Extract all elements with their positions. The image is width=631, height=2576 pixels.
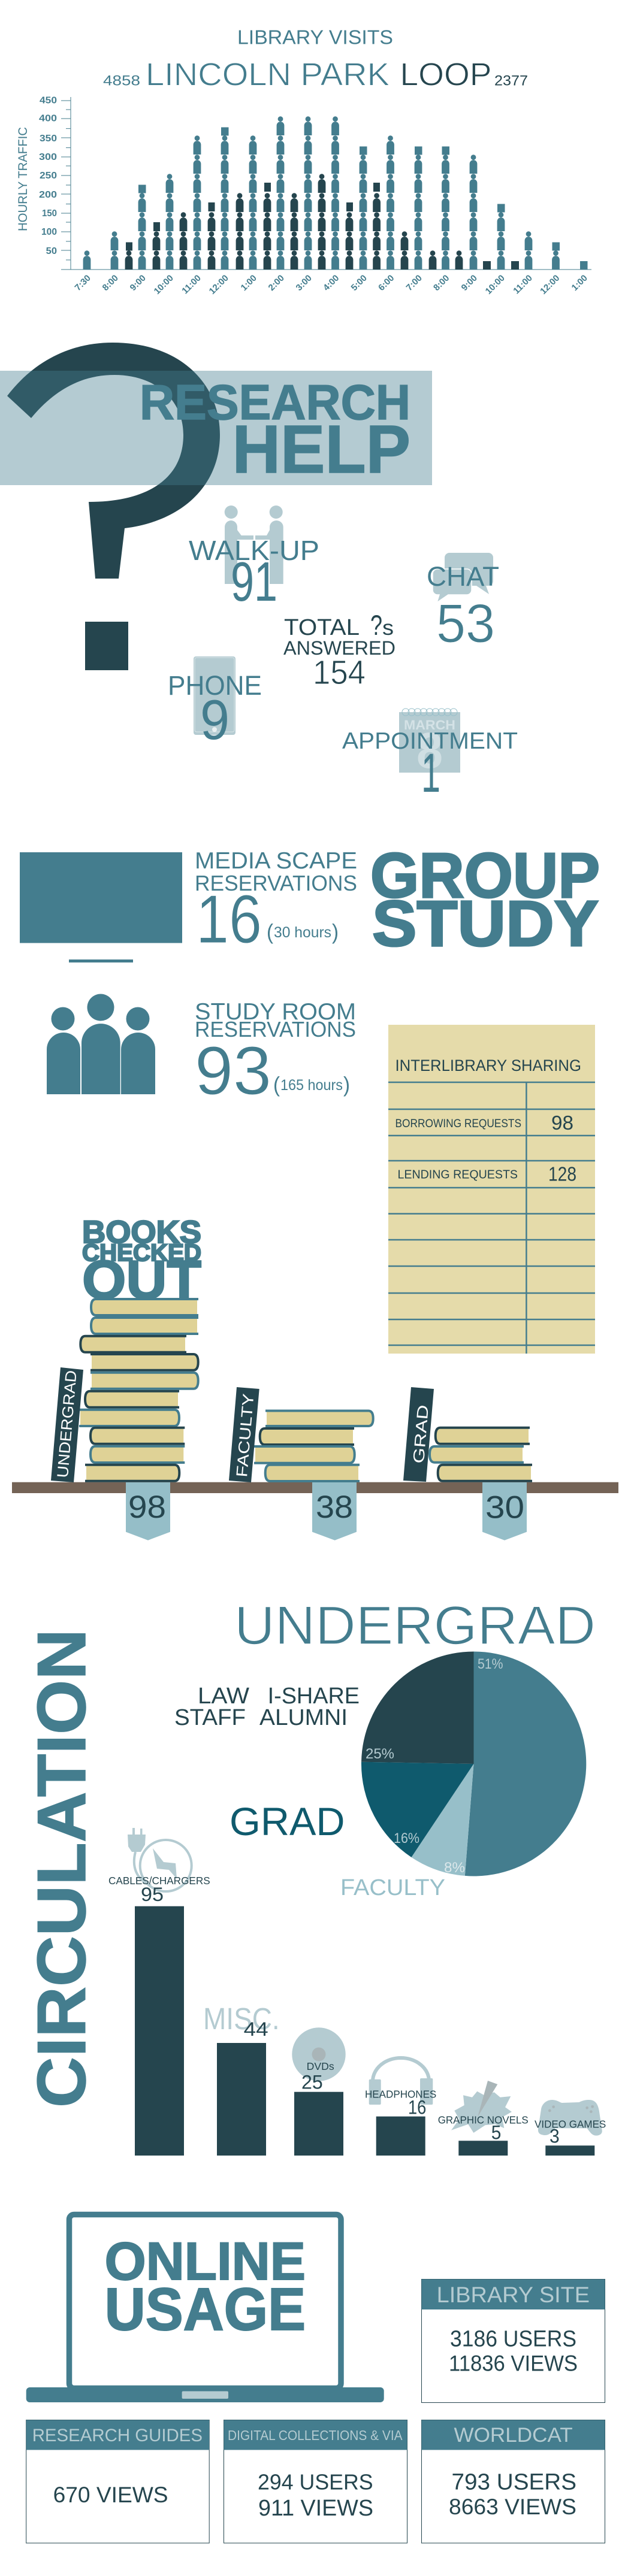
axis label: hourly traffic: HOURLY TRAFFIC bbox=[16, 127, 30, 231]
text: study room reservations: RESERVATIONS bbox=[195, 1017, 356, 1042]
panel: interlibrary sharing card: 128 bbox=[548, 1163, 576, 1185]
label: law, i-share, staff, alumni: I-SHARE bbox=[268, 1684, 360, 1709]
pie chart: 25% bbox=[366, 1746, 394, 1762]
icon: calendar: 8 bbox=[416, 722, 443, 779]
text: media scape reservations: ) bbox=[332, 919, 339, 944]
grad stack bbox=[430, 1428, 532, 1481]
panel: digital collections and via bbox=[224, 2420, 407, 2543]
stat: chat bbox=[427, 553, 499, 654]
y axis labels: 300 bbox=[39, 152, 57, 162]
banner band bbox=[0, 371, 432, 485]
x axis labels: 8:00 bbox=[101, 273, 120, 293]
stat: total questions answered: TOTAL bbox=[284, 615, 360, 640]
bookmark: undergrad 98 bbox=[126, 1482, 170, 1540]
bookmark: faculty 38: 38 bbox=[316, 1490, 353, 1525]
pie chart: 16% bbox=[394, 1830, 419, 1847]
text: study room reservations: 93 bbox=[195, 1033, 271, 1109]
panel: library site: 11836 VIEWS bbox=[449, 2351, 578, 2375]
icon: laptop bbox=[26, 2215, 384, 2402]
text: media scape reservations: RESERVATIONS bbox=[195, 871, 357, 895]
stat: walk-up: 91 bbox=[231, 550, 277, 613]
panel: digital collections and via: 911 VIEWS bbox=[258, 2496, 373, 2521]
icon: game controller bbox=[538, 2100, 602, 2136]
heading: group study: GROUP bbox=[370, 840, 600, 911]
spine: faculty: FACULTY bbox=[233, 1393, 257, 1478]
bookmark: undergrad 98: 98 bbox=[128, 1490, 166, 1525]
icon: comic burst bbox=[451, 2081, 512, 2133]
pie chart: 51% bbox=[478, 1656, 503, 1672]
text: study room reservations: 165 hours bbox=[280, 1077, 343, 1094]
stat: walk-up: WALK-UP bbox=[189, 535, 319, 566]
panel: worldcat bbox=[422, 2420, 605, 2543]
bar: DVDs: 25 bbox=[301, 2072, 323, 2093]
stat: chat: 53 bbox=[436, 594, 495, 654]
stat: phone bbox=[168, 656, 262, 751]
stat: total questions answered bbox=[283, 609, 395, 692]
text: study room reservations: ) bbox=[343, 1072, 350, 1097]
bar: video games: VIDEO GAMES bbox=[535, 2118, 606, 2130]
spine: faculty bbox=[229, 1387, 259, 1482]
section: group study bbox=[20, 840, 600, 1354]
heading: online usage: ONLINE bbox=[105, 2231, 306, 2291]
text: media scape reservations: 16 bbox=[196, 882, 262, 958]
panel: interlibrary sharing card: LENDING REQUESTS bbox=[398, 1168, 518, 1181]
x axis labels: 3:00 bbox=[294, 273, 314, 293]
stat: phone: PHONE bbox=[168, 670, 262, 701]
y axis labels: 400 bbox=[39, 114, 57, 124]
icon: phone bbox=[194, 656, 236, 735]
heading: research help: HELP bbox=[233, 411, 410, 487]
text: media scape reservations: ( bbox=[267, 919, 273, 944]
icon: calendar: MARCH bbox=[404, 718, 455, 732]
stat: walk-up bbox=[189, 505, 319, 613]
x axis labels: 4:00 bbox=[321, 273, 341, 293]
section: online usage bbox=[26, 2215, 605, 2543]
stat: appointment: 1 bbox=[421, 743, 440, 804]
heading: circulation: CIRCULATION bbox=[24, 1629, 100, 2108]
panel: digital collections and via: 294 USERS bbox=[258, 2469, 373, 2494]
panel: library site: 3186 USERS bbox=[450, 2327, 576, 2352]
panel: interlibrary sharing card: 98 bbox=[551, 1112, 573, 1134]
bar: cables and chargers bbox=[108, 1828, 210, 2156]
label: law, i-share, staff, alumni: LAW bbox=[198, 1684, 249, 1709]
bar: video games bbox=[535, 2100, 606, 2156]
x axis labels: 2:00 bbox=[267, 273, 286, 293]
heading: books checked out bbox=[82, 1215, 201, 1310]
panel: research guides: RESEARCH GUIDES bbox=[32, 2426, 203, 2445]
text: study room reservations: STUDY ROOM bbox=[195, 999, 356, 1025]
bar: DVDs: DVDs bbox=[307, 2060, 334, 2072]
label: law, i-share, staff, alumni: ALUMNI bbox=[259, 1705, 348, 1730]
Lincoln Park columns bbox=[83, 116, 587, 270]
y axis labels: 150 bbox=[42, 208, 57, 219]
title: library visits: LIBRARY VISITS bbox=[237, 26, 393, 49]
stat: appointment bbox=[342, 709, 518, 804]
x axis labels: 6:00 bbox=[376, 273, 396, 293]
x axis labels: 8:00 bbox=[431, 273, 451, 293]
heading: Lincoln Park vs Loop bbox=[103, 57, 528, 93]
pie chart: 8% bbox=[444, 1860, 465, 1876]
x axis labels: 9:00 bbox=[460, 273, 479, 293]
section: circulation bbox=[24, 1596, 606, 2156]
label: law, i-share, staff, alumni: STAFF bbox=[174, 1705, 246, 1730]
panel: worldcat: WORLDCAT bbox=[454, 2424, 573, 2447]
panel: research guides bbox=[26, 2420, 209, 2543]
icon: monitor bbox=[20, 852, 182, 962]
panel: worldcat: 793 USERS bbox=[452, 2469, 576, 2495]
bar: graphic novels: 5 bbox=[491, 2122, 501, 2144]
heading: books checked out: BOOKS bbox=[82, 1215, 201, 1250]
text: study room reservations: ( bbox=[273, 1072, 280, 1097]
spine: grad: GRAD bbox=[409, 1404, 432, 1464]
heading: Lincoln Park vs Loop: LINCOLN PARK bbox=[146, 57, 390, 93]
icon: handshake bbox=[225, 505, 283, 584]
panel: interlibrary sharing card: INTERLIBRARY SHARING bbox=[395, 1057, 581, 1074]
icon: headphones bbox=[369, 2058, 433, 2105]
bookmark: grad 30: 30 bbox=[485, 1490, 524, 1525]
heading: Lincoln Park vs Loop: 4858 bbox=[103, 73, 140, 89]
heading: research help bbox=[140, 374, 410, 487]
heading: group study bbox=[370, 840, 600, 959]
stat: total questions answered: ? bbox=[370, 609, 382, 641]
panel: library site bbox=[422, 2280, 605, 2403]
icon: three people bbox=[47, 994, 155, 1094]
label: faculty: FACULTY bbox=[340, 1875, 445, 1900]
x axis labels: 1:00 bbox=[570, 273, 590, 293]
panel: research guides: 670 VIEWS bbox=[53, 2483, 168, 2507]
label: undergrad: UNDERGRAD bbox=[234, 1596, 596, 1656]
panel: library site: LIBRARY SITE bbox=[437, 2283, 590, 2307]
spine: undergrad: UNDERGRAD bbox=[53, 1370, 80, 1478]
bar: graphic novels bbox=[438, 2081, 529, 2156]
bar: DVDs bbox=[292, 2027, 346, 2156]
stat: phone: 9 bbox=[200, 688, 230, 751]
y axis labels: 50 bbox=[46, 246, 57, 256]
x axis labels: 7:00 bbox=[404, 273, 424, 293]
x axis labels: 7:30 bbox=[73, 273, 93, 293]
heading: Lincoln Park vs Loop: LOOP bbox=[400, 57, 491, 93]
section: books checked out bbox=[12, 1215, 618, 1540]
text: media scape reservations: MEDIA SCAPE bbox=[195, 848, 357, 874]
heading: research help: RESEARCH bbox=[140, 374, 410, 430]
bar: cables and chargers: 95 bbox=[141, 1884, 164, 1905]
stat: chat: CHAT bbox=[427, 561, 499, 592]
bar: cables and chargers: CABLES/CHARGERS bbox=[108, 1875, 210, 1887]
y axis labels bbox=[39, 96, 57, 256]
text: study room reservations bbox=[195, 999, 356, 1109]
x axis labels: 10:00 bbox=[484, 273, 507, 296]
bar: video games: 3 bbox=[550, 2126, 560, 2147]
x axis labels: 11:00 bbox=[180, 273, 203, 296]
x axis labels: 11:00 bbox=[511, 273, 535, 296]
panel: interlibrary sharing card: BORROWING REQUESTS bbox=[395, 1118, 521, 1130]
label: grad: GRAD bbox=[230, 1799, 345, 1844]
bar: misc: 44 bbox=[244, 2018, 268, 2040]
bar: headphones: 16 bbox=[408, 2096, 426, 2118]
panel: interlibrary sharing card bbox=[388, 1025, 595, 1354]
icon: plug bbox=[128, 1828, 192, 1891]
Loop columns bbox=[125, 174, 519, 270]
bar: headphones: HEADPHONES bbox=[365, 2088, 436, 2100]
icon: disc bbox=[292, 2027, 346, 2081]
stat: appointment: APPOINTMENT bbox=[342, 728, 518, 754]
pie chart bbox=[361, 1651, 586, 1876]
panel: worldcat: 8663 VIEWS bbox=[449, 2495, 576, 2519]
x axis labels bbox=[73, 273, 590, 296]
text: media scape reservations bbox=[195, 848, 357, 958]
bar: graphic novels: GRAPHIC NOVELS bbox=[438, 2114, 529, 2126]
bookmark: grad 30 bbox=[482, 1482, 527, 1540]
heading: online usage bbox=[105, 2231, 306, 2343]
y axis labels: 250 bbox=[40, 171, 57, 181]
bookmark: faculty 38 bbox=[312, 1482, 357, 1540]
stat: total questions answered: s bbox=[382, 616, 394, 640]
stat: total questions answered: ANSWERED bbox=[283, 637, 395, 659]
bar: misc: MISC. bbox=[203, 2002, 280, 2036]
section: research help bbox=[0, 343, 518, 804]
icon: question mark bbox=[7, 343, 220, 670]
bar chart: misc circulation bbox=[108, 1828, 606, 2156]
chart: hourly traffic pictogram bbox=[39, 96, 591, 296]
bar: headphones bbox=[365, 2058, 436, 2156]
stat: total questions answered: 154 bbox=[313, 653, 366, 692]
panel: digital collections and via: DIGITAL COLLECTIONS & VIA bbox=[228, 2427, 403, 2443]
icon: speech bubbles bbox=[433, 553, 493, 603]
heading: books checked out: CHECKED bbox=[82, 1240, 201, 1266]
y axis labels: 200 bbox=[39, 190, 57, 200]
faculty stack bbox=[254, 1411, 373, 1481]
heading: Lincoln Park vs Loop: 2377 bbox=[494, 73, 528, 89]
y axis labels: 450 bbox=[40, 96, 57, 106]
y axis labels: 100 bbox=[41, 227, 57, 237]
label: law, i-share, staff, alumni bbox=[174, 1684, 360, 1730]
text: media scape reservations: 30 hours bbox=[274, 924, 331, 941]
x axis labels: 9:00 bbox=[128, 273, 148, 293]
spine: grad bbox=[403, 1387, 434, 1482]
heading: group study: STUDY bbox=[372, 887, 599, 959]
y axis labels: 350 bbox=[40, 134, 57, 144]
x axis labels: 1:00 bbox=[239, 273, 259, 293]
x axis labels: 12:00 bbox=[538, 273, 561, 296]
icon: calendar bbox=[399, 709, 460, 779]
section: library visits bbox=[16, 26, 591, 296]
x axis labels: 10:00 bbox=[152, 273, 176, 296]
heading: books checked out: OUT bbox=[82, 1250, 201, 1310]
chart axes bbox=[61, 97, 591, 270]
undergrad stack bbox=[79, 1299, 198, 1481]
x axis labels: 12:00 bbox=[207, 273, 231, 296]
shelf bbox=[12, 1482, 618, 1493]
heading: online usage: USAGE bbox=[105, 2276, 306, 2343]
bar: misc bbox=[203, 2002, 280, 2156]
x axis labels: 5:00 bbox=[349, 273, 369, 293]
